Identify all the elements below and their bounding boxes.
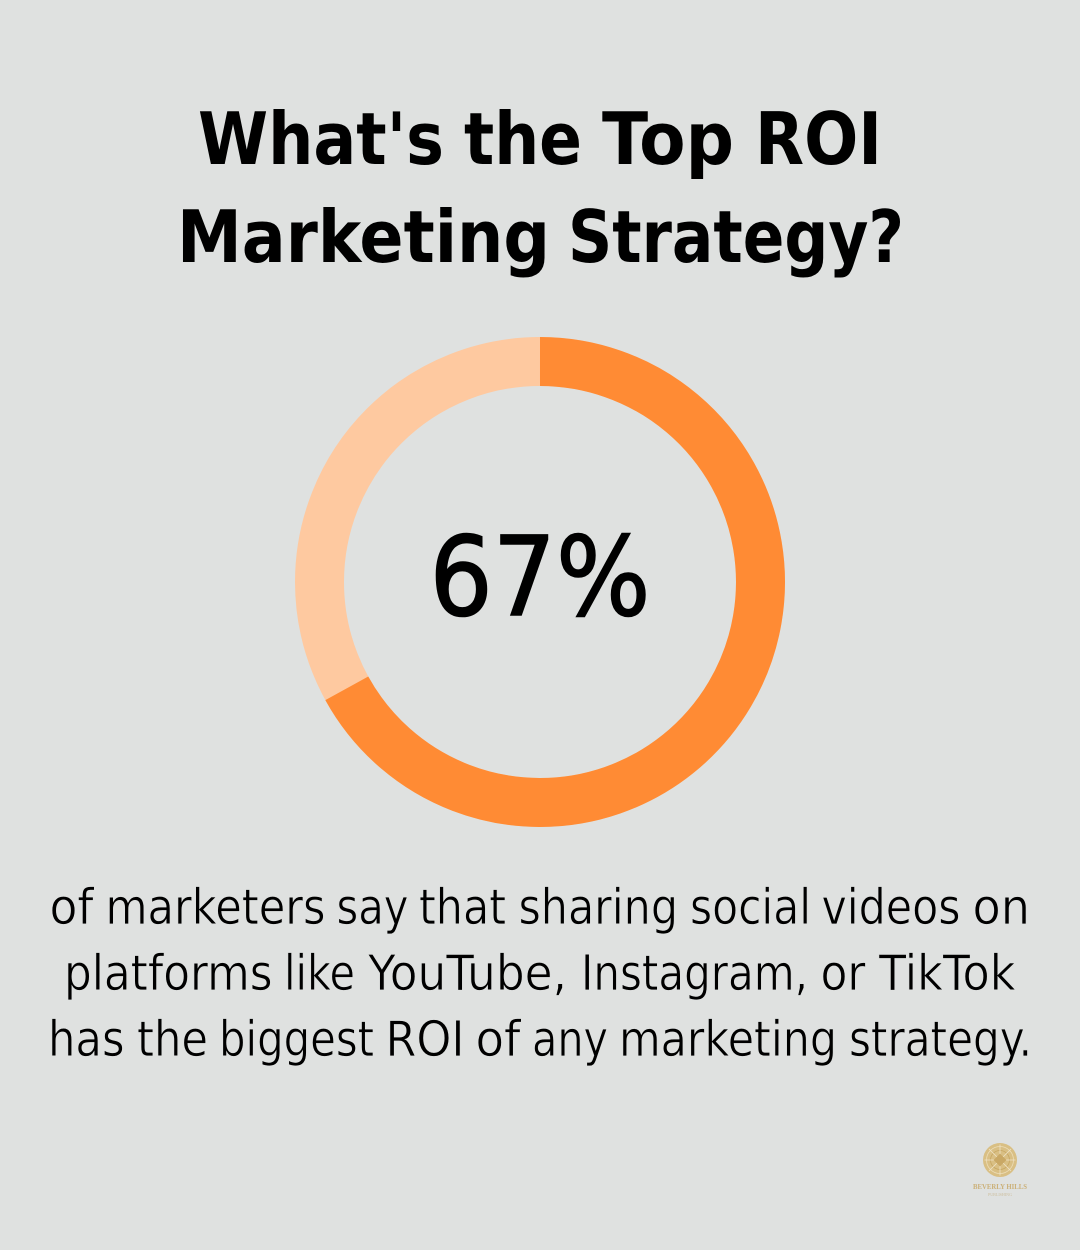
logo: Beverly Hills Publishing xyxy=(973,1143,1027,1197)
logo subtitle: PUBLISHING xyxy=(988,1193,1012,1197)
description text: sharing xyxy=(518,879,678,936)
description text: videos xyxy=(822,879,960,936)
title: Top xyxy=(602,97,734,181)
description text: the xyxy=(137,1011,208,1068)
logo emblem xyxy=(983,1143,1017,1177)
description text: of xyxy=(50,879,95,936)
description text: TikTok xyxy=(878,945,1016,1002)
title xyxy=(177,97,904,279)
description text: marketers xyxy=(106,879,326,936)
description text: has xyxy=(48,1011,124,1068)
description text: or xyxy=(820,945,866,1002)
description text: biggest xyxy=(219,1011,374,1068)
description text: marketing xyxy=(619,1011,837,1068)
description text: of xyxy=(476,1011,522,1068)
description text: Instagram, xyxy=(581,945,808,1002)
description text xyxy=(48,879,1032,1068)
title: What's xyxy=(198,97,444,181)
description text: that xyxy=(419,879,506,936)
description text: like xyxy=(284,945,355,1002)
description text: any xyxy=(532,1011,608,1068)
description text: YouTube, xyxy=(367,945,567,1002)
logo wordmark: BEVERLY HILLS xyxy=(973,1183,1027,1191)
title: the xyxy=(464,97,582,181)
title: ROI xyxy=(755,97,882,181)
donut chart: 67% xyxy=(320,362,760,802)
title: Strategy? xyxy=(568,195,904,279)
description text: ROI xyxy=(386,1011,464,1068)
title: Marketing xyxy=(177,195,550,279)
description text: say xyxy=(336,879,408,936)
description text: social xyxy=(690,879,811,936)
donut value: 67% xyxy=(430,513,650,641)
description text: strategy. xyxy=(849,1011,1032,1068)
description text: platforms xyxy=(64,945,272,1002)
description text: on xyxy=(972,879,1030,936)
